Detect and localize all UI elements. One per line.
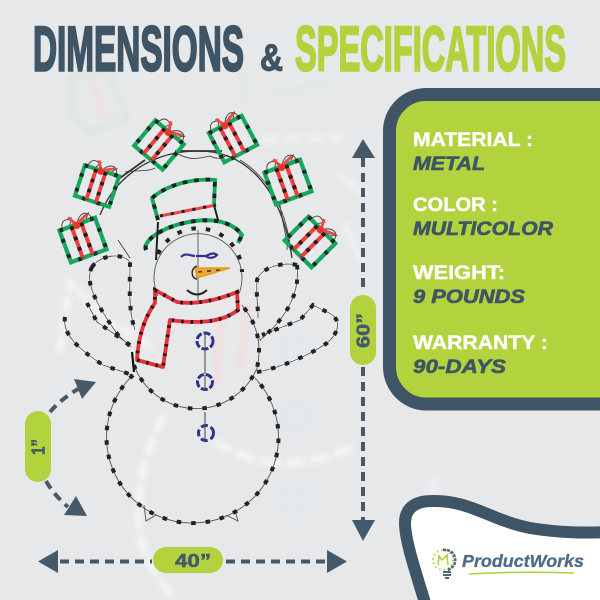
spec: color: MULTICOLOR: [413, 219, 553, 240]
logo wordmark: ProductWorks: [462, 551, 584, 571]
lower body: [107, 375, 279, 523]
snowman light figure: [56, 108, 342, 523]
red scarf: [137, 290, 238, 367]
blue buttons: [197, 332, 214, 441]
spec: color: [413, 195, 553, 240]
width dimension: 40 inches: 40”: [175, 551, 211, 571]
height dimension: 60 inches: 60”: [354, 313, 374, 348]
title: &: [260, 38, 283, 78]
head: [154, 228, 242, 300]
arch wires joining gifts: [100, 151, 292, 258]
panel: brand logo corner: [405, 501, 600, 600]
spec: material: [413, 130, 533, 175]
height dimension: 60 inches: [350, 139, 376, 541]
gift boxes: [56, 108, 342, 267]
spec: weight: WEIGHT:: [413, 263, 505, 284]
depth dimension: 1 inch: [25, 379, 96, 516]
carrot nose: [192, 266, 230, 279]
title: DIMENSIONS: [33, 14, 244, 84]
spec: warranty: [413, 333, 548, 378]
depth dimension: 1 inch: 1”: [28, 439, 48, 455]
spec: material: MATERIAL :: [413, 130, 533, 151]
top hat: [146, 180, 242, 260]
spec: weight: [413, 263, 525, 308]
right raised arm: [257, 264, 338, 372]
faded background snowman glow: [60, 70, 435, 596]
left raised arm: [65, 256, 135, 375]
spec: warranty: 90-DAYS: [413, 357, 506, 378]
spec: warranty: WARRANTY :: [413, 333, 548, 354]
spec: weight: 9 POUNDS: [413, 287, 525, 308]
upper body: [132, 305, 259, 409]
eyes: [181, 253, 217, 258]
logo underline: [469, 572, 574, 574]
spec: color: COLOR :: [413, 195, 498, 216]
spec: material: METAL: [413, 154, 485, 175]
width dimension: 40 inches: [38, 547, 347, 573]
panel: specifications: [390, 94, 600, 404]
icon: lightbulb and gear: [433, 550, 455, 578]
